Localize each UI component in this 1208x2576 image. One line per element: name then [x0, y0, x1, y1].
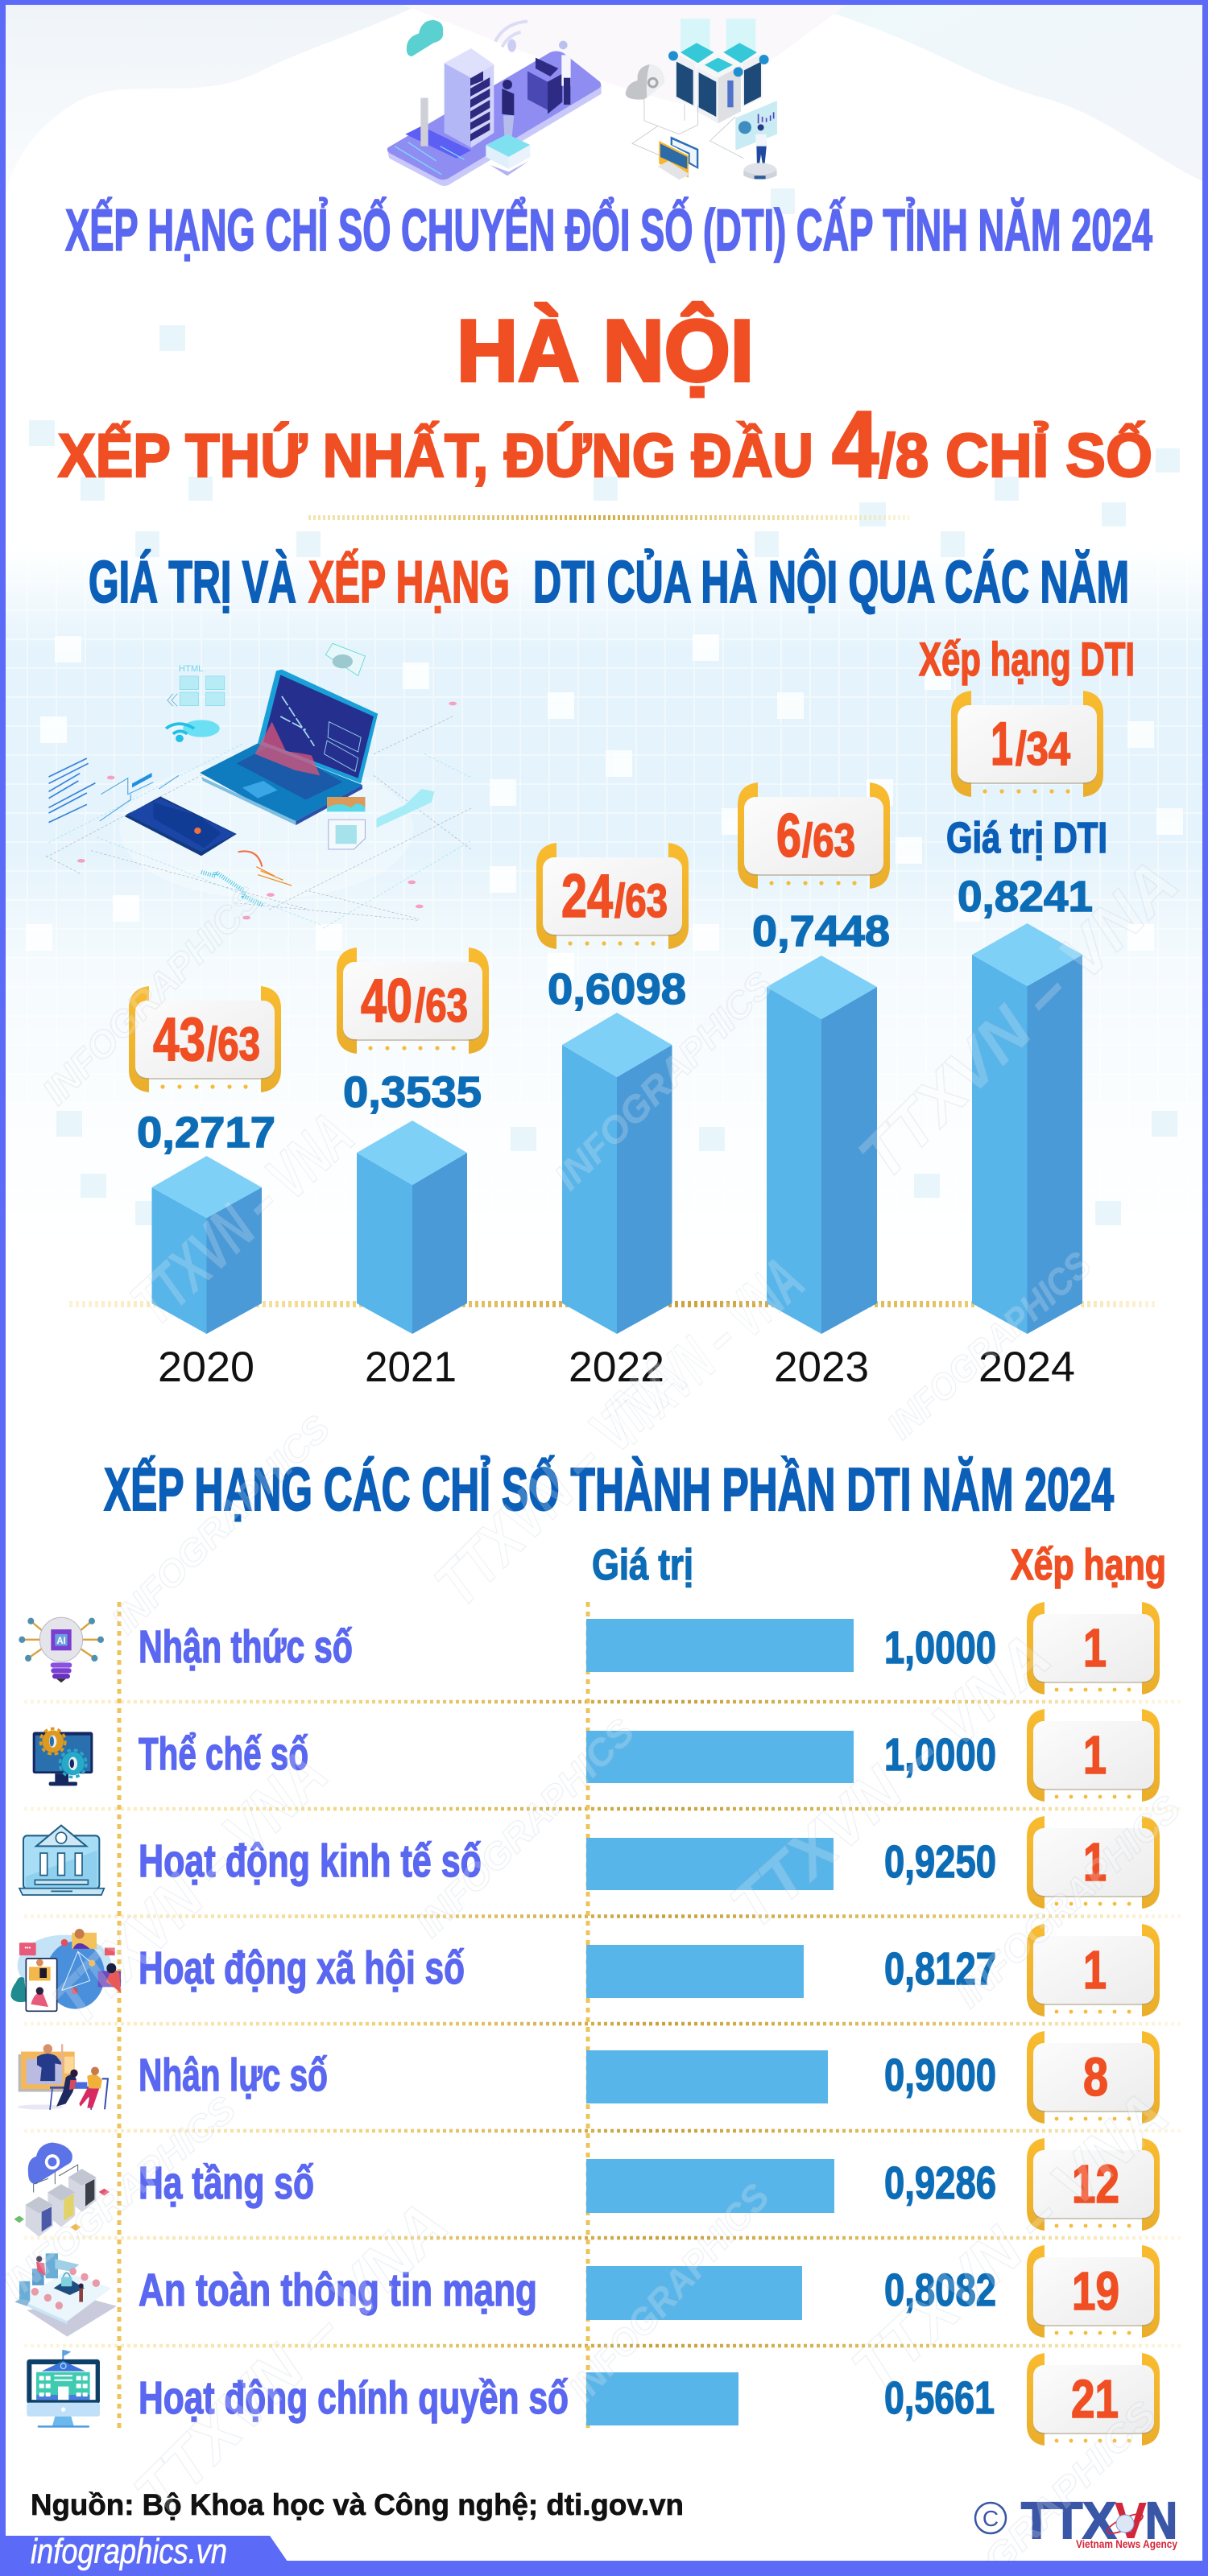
illustration: laptop and phone — [46, 643, 473, 928]
label: Hoạt động chính quyền số — [139, 2372, 569, 2424]
icon: server cluster with cloud and dashboard — [626, 19, 777, 180]
value bar — [586, 2372, 738, 2425]
value: 0,9250 — [884, 1836, 996, 1888]
watermarks: INFOGRAPHICS — [546, 964, 781, 1198]
rank — [1027, 1924, 1160, 2017]
bar 2020 — [137, 1108, 275, 1391]
rank: 1 — [1083, 1618, 1107, 1678]
logo: TTXVN Vietnam News Agency — [975, 2491, 1177, 2550]
rank badge 2024: 1/34: /34 — [1016, 723, 1070, 775]
label: Thể chế số — [139, 1728, 308, 1780]
rank badge 2023: 6/63 — [738, 782, 890, 889]
icon: connected society globe: ••• — [24, 1944, 31, 1951]
watermarks: TTXVN – VNA — [838, 2078, 1181, 2405]
label: Nhận thức số — [139, 1621, 353, 1673]
rank badge 2022: 24/63: /63 — [614, 875, 668, 927]
icon: e-government monitor — [27, 2350, 100, 2428]
rank badge 2022: 24/63: 24 — [561, 862, 613, 931]
rank — [1027, 1602, 1160, 1695]
bar 2021: 0,3535 — [343, 1068, 482, 1117]
rank badge 2021: 40/63: 40 — [361, 967, 412, 1035]
logo: TTXVN Vietnam News Agency: TTX — [1021, 2491, 1116, 2549]
value bar — [586, 2050, 828, 2103]
rank — [1027, 1709, 1160, 1802]
watermarks: INFOGRAPHICS — [561, 2175, 777, 2410]
value: 1,0000 — [884, 1729, 996, 1781]
icon: connected society globe — [10, 1929, 121, 2011]
bar chart: DTI value by year — [137, 873, 1093, 1391]
subheading: first place, leading 4 of 8: /8 CHỈ SỐ — [879, 422, 1152, 490]
value: 0,8082 — [884, 2264, 996, 2316]
bar 2024: 2024 — [978, 1344, 1075, 1391]
watermarks: TTXVN – VNA — [717, 1620, 1064, 1942]
legend label: DTI value: Giá trị DTI — [946, 814, 1107, 862]
bar 2023: 0,7448 — [752, 907, 890, 956]
rank badge 2021: 40/63 — [337, 947, 489, 1054]
rank badge 2022: 24/63 — [536, 843, 689, 949]
section heading: DTI value and rank over years: GIÁ TRỊ VÀ — [89, 550, 296, 615]
icon: AI light bulb — [19, 1617, 104, 1682]
bar 2022 — [548, 965, 686, 1391]
bar 2024: 0,8241 — [958, 873, 1093, 921]
row: An toàn thông tin mạng — [139, 2245, 1160, 2338]
background: page with header waves and pale checker pattern — [6, 5, 1202, 1225]
value: 1,0000 — [884, 1622, 996, 1674]
icon: AI light bulb: AI — [56, 1637, 66, 1646]
value: 0,9286 — [884, 2157, 996, 2209]
floating data widgets — [49, 643, 457, 919]
icon: teacher and students — [18, 2044, 108, 2110]
phone — [125, 796, 237, 856]
column header: rank: Xếp hạng — [1011, 1541, 1166, 1589]
watermarks — [0, 846, 1192, 2576]
row: Hạ tầng số — [139, 2138, 1160, 2231]
watermarks: INFOGRAPHICS — [407, 1711, 643, 1945]
rank — [1027, 2353, 1160, 2446]
bar 2023: 2023 — [774, 1344, 869, 1391]
watermarks: INFOGRAPHICS — [103, 1407, 338, 1641]
column header: value: Giá trị — [592, 1541, 693, 1589]
row: Thể chế số — [139, 1709, 1160, 1802]
watermarks: INFOGRAPHICS — [34, 878, 269, 1113]
value bar — [586, 2159, 834, 2213]
subheading: first place, leading 4 of 8: XẾP THỨ NHẤT, ĐỨNG ĐẦU — [58, 422, 813, 490]
row: Hoạt động kinh tế số — [139, 1816, 1160, 1909]
rank — [1027, 2138, 1160, 2231]
subheading: first place, leading 4 of 8: 4 — [832, 392, 879, 497]
floating data widgets: HTML — [179, 664, 203, 674]
rank — [1027, 2245, 1160, 2338]
value: 0,9000 — [884, 2050, 996, 2101]
icon: laptop with bank building — [19, 1826, 104, 1895]
row: Hoạt động chính quyền số — [139, 2353, 1160, 2446]
label: An toàn thông tin mạng — [139, 2264, 537, 2316]
glow and grid lines — [46, 716, 473, 928]
watermarks: TTXVN – VNA — [590, 1245, 817, 1459]
illustration: data center platform and servers — [387, 19, 777, 186]
logo: TTXVN Vietnam News Agency: N — [1145, 2491, 1177, 2549]
watermarks: TTXVN – VNA — [39, 1737, 341, 2038]
row: Nhân lực số — [139, 2031, 1160, 2124]
value bar — [586, 1945, 804, 1998]
label: Nhân lực số — [139, 2050, 328, 2101]
value: 0,8127 — [884, 1943, 996, 1995]
rank: 1 — [1083, 1940, 1107, 2000]
section heading: DTI value and rank over years — [89, 550, 1129, 615]
rank badge 2023: 6/63: /63 — [802, 815, 855, 867]
value bar — [586, 1838, 834, 1890]
bar 2022: 2022 — [569, 1344, 664, 1391]
rank badge 2023: 6/63: 6 — [776, 802, 801, 870]
label: Hoạt động kinh tế số — [139, 1835, 482, 1887]
icons column 2: rows five to eight — [14, 2044, 117, 2428]
value bar — [586, 1619, 854, 1672]
rank: 21 — [1071, 2369, 1119, 2429]
icon: digital infrastructure cloud servers — [14, 2143, 110, 2237]
heading: Hà Nội: HÀ NỘI — [457, 302, 754, 400]
rank: 1 — [1083, 1832, 1107, 1893]
watermarks: TTXVN – VNA — [118, 1099, 366, 1338]
logo: TTXVN Vietnam News Agency: V — [1115, 2491, 1147, 2549]
value: 0,5661 — [884, 2372, 995, 2424]
watermarks: TTXVN – VNA — [120, 2188, 461, 2529]
row: Nhận thức số — [139, 1602, 1160, 1695]
rank: 8 — [1083, 2047, 1108, 2107]
rank badge 2020: 43/63: /63 — [207, 1018, 260, 1071]
watermarks: INFOGRAPHICS — [0, 2087, 243, 2306]
bar 2021 — [343, 1068, 482, 1391]
label: Hạ tầng số — [139, 2157, 314, 2209]
label: Hoạt động xã hội số — [139, 1942, 465, 1994]
rank badge 2020: 43/63: 43 — [153, 1005, 205, 1074]
icons column 1: rows one to four — [10, 1617, 121, 2011]
section heading: DTI value and rank over years: XẾP HẠNG — [308, 550, 510, 615]
rank — [1027, 1816, 1160, 1909]
logo: TTXVN Vietnam News Agency: Vietnam News Agency — [1076, 2537, 1177, 2550]
rank badge 2024: 1/34: 1 — [991, 710, 1013, 778]
watermarks: TTXVN – VNA — [845, 846, 1192, 1193]
icon: monitor with gears — [33, 1728, 93, 1785]
subheading: first place, leading 4 of 8 — [58, 392, 1152, 497]
rank: 1 — [1083, 1725, 1107, 1785]
rank badge 2024: 1/34 — [951, 691, 1103, 797]
rank badge 2021: 40/63: /63 — [415, 980, 468, 1032]
bar 2024 — [958, 873, 1093, 1391]
watermarks: TTXVN – VNA — [421, 1341, 700, 1620]
watermarks: INFOGRAPHICS — [879, 1243, 1099, 1447]
bar 2023 — [752, 907, 890, 1391]
row: Hoạt động xã hội số — [139, 1924, 1160, 2017]
bar 2020: 2020 — [158, 1344, 254, 1391]
source note: Nguồn: Bộ Khoa học và Công nghệ; dti.gov.vn — [31, 2488, 684, 2521]
laptop — [200, 670, 378, 825]
website tab: infographics.vn — [31, 2532, 227, 2571]
icon: cyber security platform — [14, 2253, 117, 2337]
rank: 19 — [1072, 2261, 1119, 2322]
bar 2022: 0,6098 — [548, 965, 686, 1013]
rank — [1027, 2031, 1160, 2124]
value bar — [586, 2266, 802, 2320]
bar 2021: 2021 — [365, 1344, 457, 1391]
rank: 12 — [1072, 2154, 1119, 2215]
rank badge 2020: 43/63 — [129, 986, 281, 1092]
watermarks: INFOGRAPHICS — [947, 1787, 1188, 2015]
icon: platform with server tower and people — [387, 20, 602, 186]
bar 2020: 0,2717 — [137, 1108, 275, 1157]
logo: TTXVN Vietnam News Agency: C — [983, 2506, 999, 2531]
value bar — [586, 1731, 854, 1783]
